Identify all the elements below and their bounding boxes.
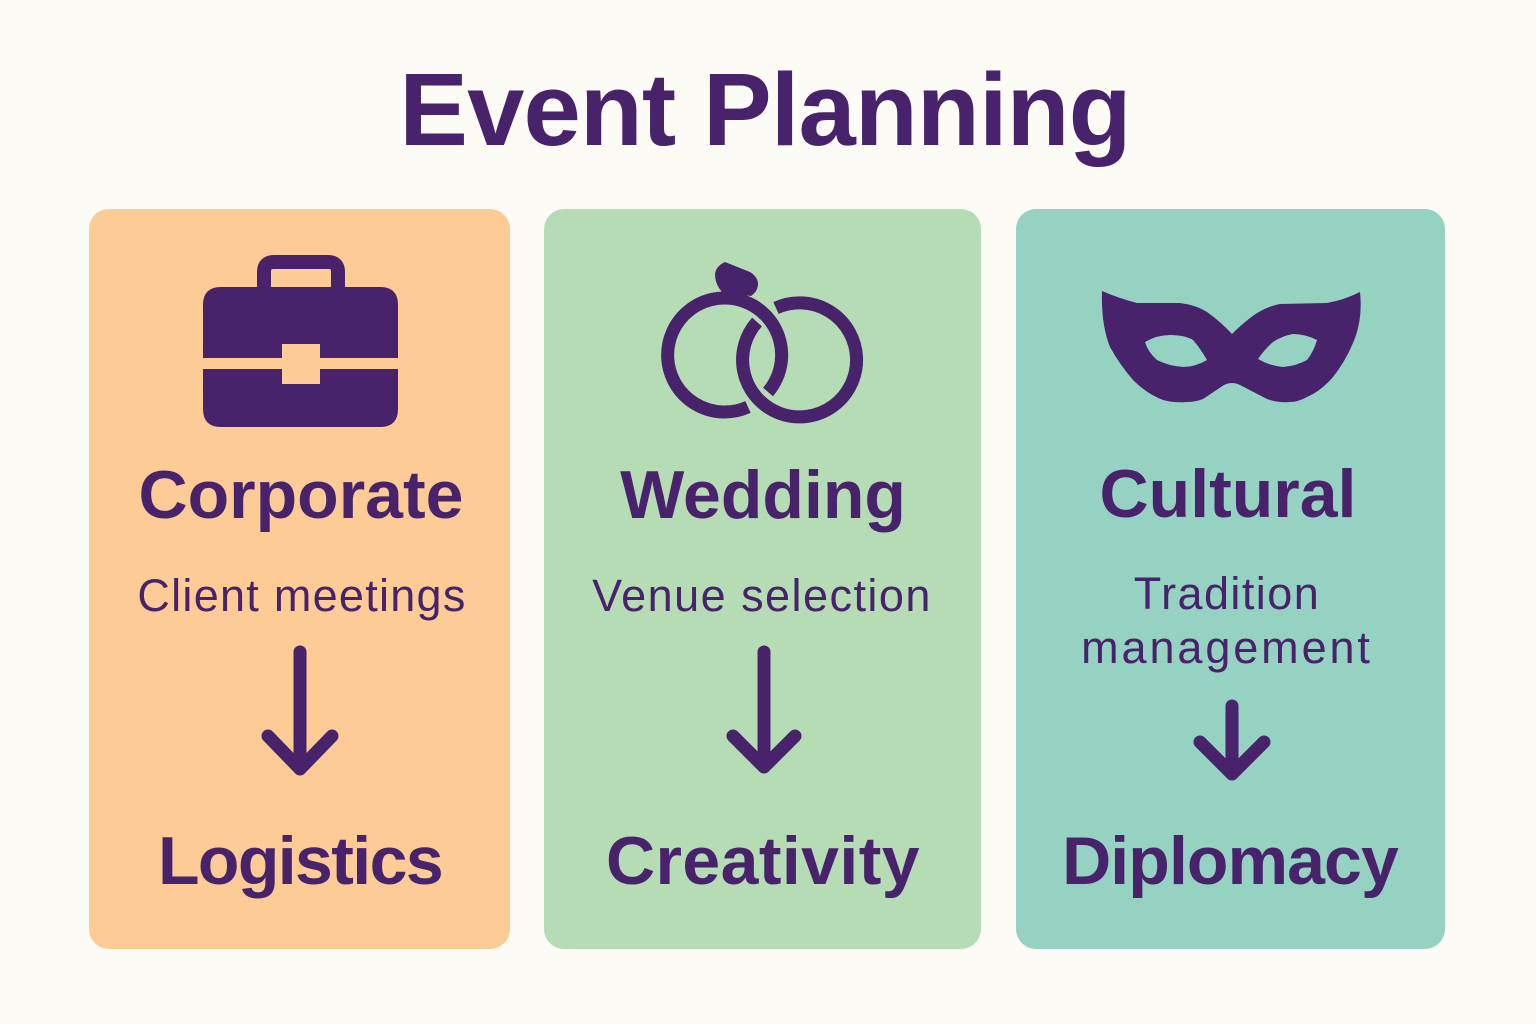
heading: wedding: Wedding: [620, 457, 906, 533]
heading: cultural: Cultural: [1100, 456, 1356, 532]
icon: wedding rings: [661, 262, 864, 424]
text: venue selection: Venue selection: [592, 570, 932, 621]
panel: corporate: [89, 209, 510, 949]
arrow: corporate: [262, 646, 338, 776]
text: client meetings: Client meetings: [137, 570, 467, 621]
arrow: cultural: [1194, 700, 1270, 780]
icon: mask: [1102, 291, 1361, 402]
heading: logistics: Logistics: [158, 823, 442, 899]
title: Event Planning: [399, 52, 1131, 167]
text: tradition management: management: [1081, 622, 1373, 673]
text: tradition management: [1081, 568, 1373, 673]
panel: wedding: [544, 209, 981, 949]
panel: cultural: [1016, 209, 1445, 949]
arrow: wedding: [726, 646, 802, 774]
heading: diplomacy: Diplomacy: [1062, 823, 1398, 899]
heading: corporate: Corporate: [139, 457, 463, 533]
text: tradition management: Tradition: [1134, 568, 1320, 619]
heading: creativity: Creativity: [606, 823, 920, 899]
icon: briefcase: [203, 255, 398, 427]
